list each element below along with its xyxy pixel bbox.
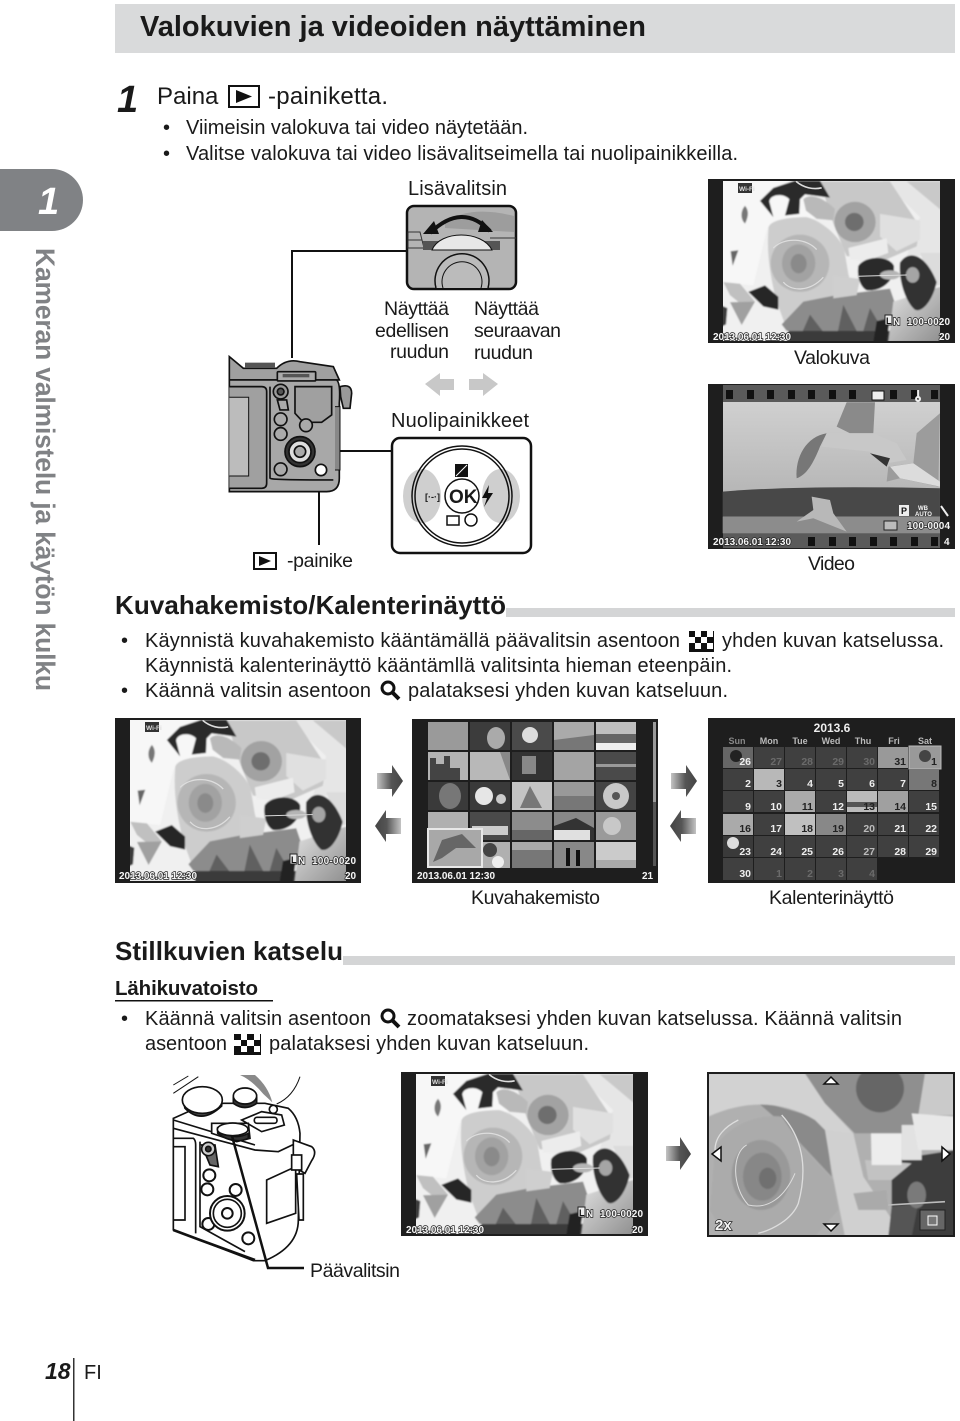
screen: video playback: AUTO bbox=[915, 512, 932, 518]
section body text: Käynnistä kuvahakemisto kääntämällä päävalitsin asentoon bbox=[145, 630, 680, 652]
calendar day numbers: 26 bbox=[739, 756, 751, 768]
weekday headers: Sat bbox=[918, 736, 932, 746]
connector lines bbox=[292, 251, 406, 545]
close-up body text: Käännä valitsin asentoon bbox=[145, 1008, 371, 1030]
inset: arrow pad bbox=[392, 438, 531, 553]
label: Lisävalitsin: Lisävalitsin bbox=[408, 178, 507, 200]
close-up body text: zoomataksesi yhden kuvan katselussa. Käännä valitsin bbox=[407, 1008, 902, 1030]
calendar day numbers: 11 bbox=[802, 801, 813, 813]
screen: before zoom: 100-0020 bbox=[600, 1209, 643, 1220]
weekday headers: Tue bbox=[792, 736, 808, 746]
screen: before zoom: L bbox=[579, 1208, 585, 1218]
calendar day numbers: 15 bbox=[925, 801, 937, 813]
caption: Kalenterinäyttö: Kalenterinäyttö bbox=[769, 887, 894, 909]
calendar day numbers: 29 bbox=[832, 756, 844, 768]
sidebar chapter title: Kameran valmistelu ja käytön kulku bbox=[30, 248, 60, 691]
screen: video playback bbox=[708, 384, 955, 549]
inset: arrow pad: [·-·] bbox=[425, 492, 440, 502]
calendar day numbers: 2 bbox=[807, 868, 813, 880]
page number: 18 bbox=[45, 1358, 71, 1384]
screen: photo playback: 100-0020 bbox=[907, 317, 950, 328]
section body text: Käynnistä kalenterinäyttö kääntämllä valitsinta hieman eteenpäin. bbox=[145, 655, 732, 677]
screen: photo playback bbox=[708, 178, 955, 343]
screen: thumbnail index bbox=[412, 719, 658, 883]
calendar day numbers: 6 bbox=[869, 778, 875, 790]
close-up body text: palataksesi yhden kuvan katseluun. bbox=[269, 1033, 589, 1055]
close-up body text bbox=[121, 1008, 902, 1055]
screen: single photo: N bbox=[298, 856, 305, 867]
section body text: Käännä valitsin asentoon bbox=[145, 680, 371, 702]
step 1 heading: Paina bbox=[157, 83, 219, 110]
caption: Valokuva: Valokuva bbox=[794, 347, 870, 369]
label: previous frame: ruudun bbox=[390, 341, 449, 363]
calendar day numbers: 29 bbox=[925, 846, 937, 858]
illustration: camera back bbox=[229, 357, 352, 492]
calendar day numbers: 8 bbox=[931, 778, 937, 790]
calendar day numbers: 4 bbox=[869, 868, 875, 880]
label: previous frame bbox=[375, 298, 449, 363]
section body text: yhden kuvan katselussa. bbox=[722, 630, 944, 652]
section body text bbox=[121, 630, 944, 702]
caption: Video: Video bbox=[808, 553, 855, 575]
calendar day numbers: 1 bbox=[931, 756, 937, 768]
section heading: still images: Stillkuvien katselu bbox=[115, 936, 343, 966]
arrow: zoom in bbox=[666, 1137, 691, 1170]
screen: single photo: Wi-Fi bbox=[146, 725, 162, 732]
weekday headers: Thu bbox=[855, 736, 871, 746]
calendar day numbers: 20 bbox=[863, 823, 875, 835]
calendar day numbers: 28 bbox=[894, 846, 906, 858]
inset: arrow pad: OK bbox=[449, 487, 478, 508]
pointer line: main dial bbox=[232, 1136, 304, 1268]
calendar day numbers: 7 bbox=[900, 778, 906, 790]
screen: photo playback: Wi-Fi bbox=[739, 186, 755, 193]
page number bbox=[45, 1358, 102, 1421]
calendar day numbers bbox=[739, 756, 937, 880]
thumbnail grid bbox=[428, 722, 636, 868]
calendar day numbers: 25 bbox=[801, 846, 813, 858]
step 1 bullets bbox=[163, 117, 738, 165]
weekday headers: Wed bbox=[822, 736, 840, 746]
screen: before zoom bbox=[401, 1071, 648, 1236]
screen: thumbnail index: 21 bbox=[642, 871, 654, 882]
arrows: index to calendar bbox=[670, 765, 697, 842]
inset: sub dial bbox=[407, 206, 516, 289]
calendar day numbers: 31 bbox=[894, 756, 906, 768]
screen: thumbnail index: 2013.06.01 12:30 bbox=[417, 871, 495, 882]
screen: photo playback: N bbox=[893, 317, 900, 328]
screen: video playback: 4 bbox=[944, 537, 950, 548]
section body text: • bbox=[121, 680, 128, 702]
title band: Valokuvien ja videoiden näyttäminen bbox=[140, 11, 646, 43]
screen: before zoom: N bbox=[586, 1209, 593, 1220]
label: Päävalitsin: Päävalitsin bbox=[310, 1260, 400, 1282]
calendar day numbers: 1 bbox=[776, 868, 782, 880]
calendar day numbers: 9 bbox=[745, 801, 751, 813]
screen: before zoom: 20 bbox=[632, 1225, 644, 1236]
step 1 bullets: • bbox=[163, 143, 170, 165]
calendar day numbers: 3 bbox=[838, 868, 844, 880]
screen: single photo: 100-0020 bbox=[312, 856, 356, 867]
weekday headers: Sun bbox=[728, 736, 746, 746]
screen: photo playback: 20 bbox=[939, 332, 951, 343]
screen: calendar: 2013.6 bbox=[814, 721, 851, 735]
section heading: index and calendar: Kuvahakemisto/Kalenterinäyttö bbox=[115, 590, 506, 620]
calendar day numbers: 27 bbox=[863, 846, 875, 858]
calendar day numbers: 26 bbox=[832, 846, 844, 858]
calendar day numbers: 28 bbox=[801, 756, 813, 768]
close-up body text: asentoon bbox=[145, 1033, 227, 1055]
calendar day numbers: 5 bbox=[838, 778, 844, 790]
weekday headers: Fri bbox=[888, 736, 900, 746]
step 1 bullets: Valitse valokuva tai video lisävalitseimella tai nuolipainikkeilla. bbox=[186, 143, 738, 165]
calendar day numbers: 24 bbox=[770, 846, 782, 858]
label: Nuolipainikkeet: Nuolipainikkeet bbox=[391, 410, 529, 432]
icon: magnifier bbox=[382, 682, 399, 699]
calendar day numbers: 30 bbox=[739, 868, 751, 880]
screen: video playback: 2013.06.01 12:30 bbox=[713, 537, 791, 548]
screen: zoomed view: 2x bbox=[715, 1217, 732, 1234]
label: next frame: seuraavan bbox=[474, 320, 561, 342]
icon: index grid bbox=[689, 631, 714, 652]
calendar day numbers: 4 bbox=[807, 778, 813, 790]
step 1 heading: -painiketta. bbox=[268, 83, 388, 110]
subheading: close-up playback: Lähikuvatoisto bbox=[115, 977, 258, 1000]
label: previous frame: Näyttää bbox=[384, 298, 449, 320]
screen: video playback: WB bbox=[918, 506, 929, 512]
calendar day numbers: 13 bbox=[863, 801, 875, 813]
calendar day numbers: 22 bbox=[925, 823, 937, 835]
step 1 heading: 1 bbox=[117, 79, 138, 121]
step 1 bullets: Viimeisin valokuva tai video näytetään. bbox=[186, 117, 528, 139]
calendar day numbers: 10 bbox=[770, 801, 782, 813]
label: playback button bbox=[254, 550, 353, 572]
page number: FI bbox=[84, 1362, 102, 1384]
calendar day numbers: 27 bbox=[770, 756, 782, 768]
calendar day numbers: 30 bbox=[863, 756, 875, 768]
calendar day numbers: 17 bbox=[770, 823, 782, 835]
screen: single photo: 2013.06.01 12:30 bbox=[119, 871, 197, 882]
screen: single photo: 20 bbox=[345, 871, 357, 882]
illustration: camera top bbox=[173, 1075, 315, 1261]
calendar day numbers: 2 bbox=[745, 778, 751, 790]
section heading: index and calendar bbox=[115, 590, 955, 620]
calendar day numbers: 19 bbox=[832, 823, 844, 835]
calendar day numbers: 14 bbox=[894, 801, 906, 813]
step 1 heading bbox=[117, 79, 388, 121]
screen: before zoom: Wi-Fi bbox=[432, 1079, 448, 1086]
title band bbox=[115, 4, 955, 53]
label: next frame bbox=[474, 298, 561, 364]
arrows: previous and next bbox=[425, 373, 498, 396]
calendar day numbers: 12 bbox=[832, 801, 844, 813]
calendar day numbers: 18 bbox=[801, 823, 813, 835]
icon: magnifier bbox=[382, 1010, 399, 1027]
weekday headers bbox=[728, 736, 932, 746]
label: previous frame: edellisen bbox=[375, 320, 449, 342]
screen: photo playback: 2013.06.01 12:30 bbox=[713, 332, 791, 343]
icon: index grid bbox=[234, 1034, 261, 1055]
calendar day numbers: 3 bbox=[776, 778, 782, 790]
screen: before zoom: 2013.06.01 12:30 bbox=[406, 1225, 484, 1236]
calendar day numbers: 16 bbox=[739, 823, 751, 835]
calendar cells bbox=[723, 747, 939, 880]
chapter tab: 1 bbox=[38, 181, 59, 223]
calendar day numbers: 23 bbox=[739, 846, 751, 858]
section body text: palataksesi yhden kuvan katseluun. bbox=[408, 680, 728, 702]
calendar day numbers: 21 bbox=[894, 823, 906, 835]
arrows: single to index bbox=[375, 765, 403, 842]
screen: single photo: L bbox=[291, 855, 297, 865]
label: playback button: -painike bbox=[287, 550, 353, 572]
section body text: • bbox=[121, 630, 128, 652]
screen: photo playback: L bbox=[886, 316, 892, 326]
screen: calendar bbox=[708, 718, 955, 883]
screen: zoomed view bbox=[705, 1064, 957, 1240]
video frame scene bbox=[723, 402, 940, 533]
screen: video playback: 100-0004 bbox=[907, 521, 950, 532]
chapter tab bbox=[0, 169, 83, 231]
screen: video playback: P bbox=[901, 506, 907, 516]
label: next frame: Näyttää bbox=[474, 298, 539, 320]
weekday headers: Mon bbox=[760, 736, 778, 746]
step 1 bullets: • bbox=[163, 117, 170, 139]
label: next frame: ruudun bbox=[474, 342, 533, 364]
close-up body text: • bbox=[121, 1008, 128, 1030]
screen: single photo bbox=[115, 717, 361, 883]
calendar photo cells bbox=[723, 746, 941, 857]
caption: Kuvahakemisto: Kuvahakemisto bbox=[471, 887, 600, 909]
section heading: still images bbox=[115, 936, 955, 966]
